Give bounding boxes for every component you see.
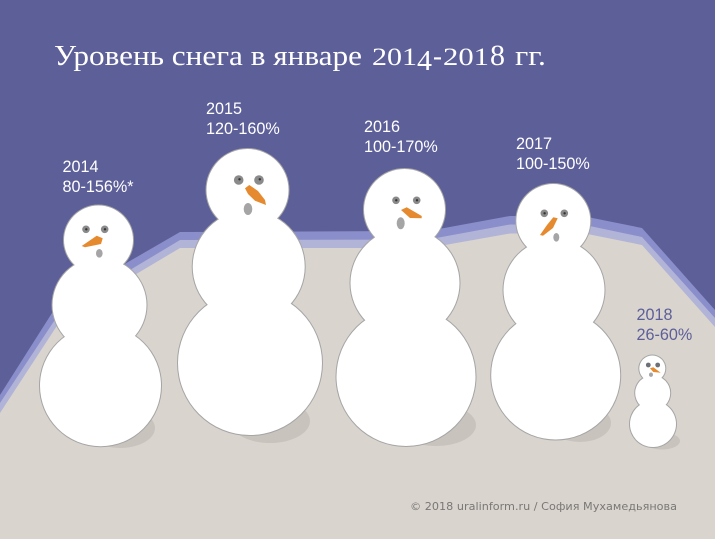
shadow [85, 408, 155, 448]
mouth [96, 249, 103, 258]
body [490, 183, 621, 440]
carrot nose [82, 236, 103, 247]
shadow [549, 404, 611, 442]
mouth [244, 203, 252, 215]
shadow [644, 432, 680, 450]
eyes [82, 226, 108, 233]
label 2014: 2014 [62, 158, 99, 176]
eyes [646, 363, 660, 367]
snowman 2016 [336, 168, 476, 447]
title: 4 [417, 45, 433, 77]
label 2018: 26-60% [636, 326, 692, 344]
eyes [234, 175, 264, 185]
body [336, 168, 476, 447]
title: 201 [443, 44, 489, 71]
label 2017: 100-150% [516, 155, 590, 173]
carrot nose [401, 207, 422, 218]
carrot nose [540, 217, 558, 236]
snowman 2014 [39, 204, 162, 448]
credit: © 2018 uralinform.ru / София Мухамедьянова [410, 500, 677, 513]
title: 8 [490, 39, 505, 72]
body [177, 148, 323, 436]
snow layers and ground [0, 216, 715, 539]
label 2015: 2015 [206, 100, 242, 118]
label 2016: 2016 [364, 118, 400, 136]
mouth [397, 217, 405, 229]
title: - [433, 40, 442, 72]
label 2015: 120-160% [206, 120, 280, 138]
label 2016: 100-170% [364, 138, 438, 156]
title: Уровень снега в январе [54, 40, 362, 72]
body [629, 354, 677, 448]
mouth [553, 233, 559, 242]
shadow [396, 404, 476, 446]
carrot nose [245, 185, 266, 205]
snowman 2018 [629, 354, 680, 450]
label 2018: 2018 [636, 306, 673, 324]
eyes [392, 196, 421, 204]
mouth [649, 372, 653, 377]
title [54, 39, 546, 77]
carrot nose [650, 367, 661, 373]
snowman 2015 [177, 148, 323, 443]
title: гг. [515, 40, 546, 72]
body [39, 204, 162, 447]
label 2014: 80-156%* [62, 178, 134, 196]
title: 201 [372, 44, 417, 71]
shadow [230, 399, 310, 443]
eyes [540, 210, 568, 217]
snowman 2017 [490, 183, 621, 442]
label 2017: 2017 [516, 135, 552, 153]
